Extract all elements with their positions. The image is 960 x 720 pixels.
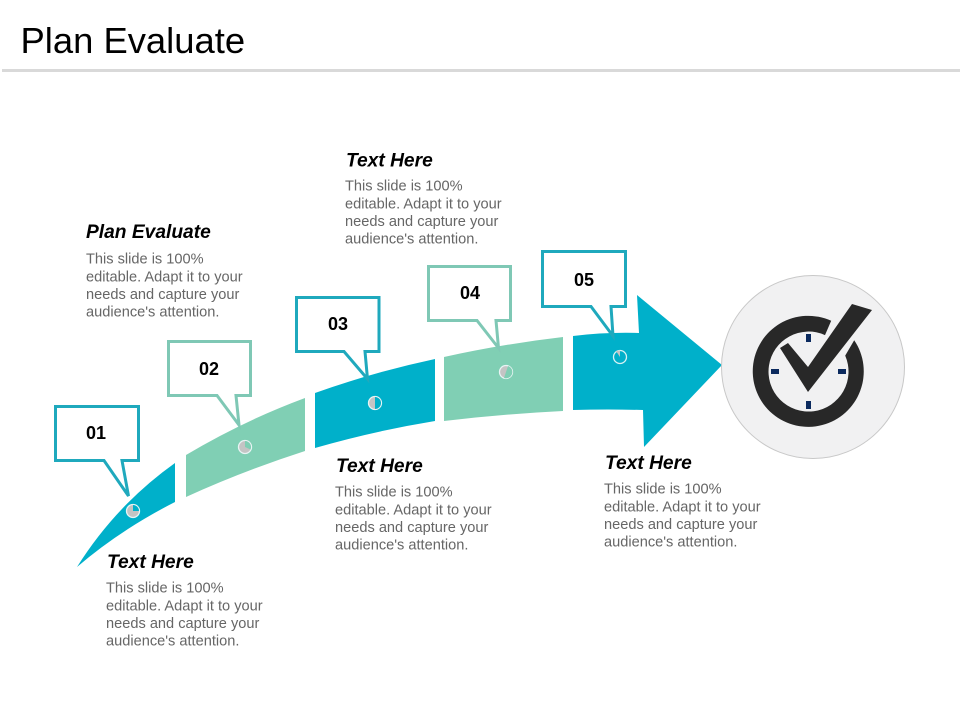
text block: bottom centre: editable. Adapt it to your [335, 502, 492, 518]
clock check icon [722, 276, 904, 458]
text block: Plan Evaluate: needs and capture your [86, 287, 239, 303]
pie icon 3 [368, 396, 382, 410]
text block: bottom centre: Text Here [336, 456, 423, 477]
text block: bottom centre [335, 456, 492, 554]
callout 02 [168, 342, 250, 425]
text block: Plan Evaluate: Plan Evaluate [86, 222, 211, 243]
text block: bottom right: This slide is 100% [604, 482, 722, 498]
text block: Plan Evaluate: audience's attention. [86, 304, 219, 320]
text block: bottom centre: needs and capture your [335, 520, 488, 536]
text block: bottom left: editable. Adapt it to your [106, 598, 263, 614]
callout 04: 04 [460, 283, 480, 303]
arrow segment 5 with head [573, 295, 722, 447]
callout 01 [56, 406, 138, 496]
callout 05: 05 [574, 270, 594, 290]
text block: bottom right: Text Here [605, 453, 692, 474]
arrow segment 2 [186, 398, 305, 497]
callout 04 [428, 266, 510, 348]
callout 02: 02 [199, 359, 219, 379]
text block: top [345, 150, 502, 248]
text block: top: audience's attention. [345, 232, 478, 248]
check mark [780, 304, 872, 392]
arrow segment 3 [315, 359, 435, 448]
arrow segment 1 [77, 463, 175, 567]
callout 03: 03 [328, 314, 348, 334]
text block: top: editable. Adapt it to your [345, 196, 502, 212]
pie icon 2 [238, 440, 252, 454]
text block: bottom left: needs and capture your [106, 616, 259, 632]
text block: bottom right [604, 453, 761, 550]
text block: bottom centre: audience's attention. [335, 538, 468, 554]
text block: bottom left [106, 552, 263, 650]
text block: Plan Evaluate: editable. Adapt it to your [86, 270, 243, 286]
arrow segment 4 [444, 337, 563, 421]
text block: Plan Evaluate [86, 222, 243, 320]
curved arrow [77, 295, 722, 567]
text block: bottom left: This slide is 100% [106, 580, 224, 596]
pie icon 1 [126, 504, 140, 518]
text block: top: This slide is 100% [345, 178, 463, 194]
text block: bottom centre: This slide is 100% [335, 484, 453, 500]
text block: bottom right: audience's attention. [604, 534, 737, 550]
pie icon 5 [614, 350, 626, 364]
grey circle [722, 276, 904, 458]
clock ticks [771, 334, 846, 409]
title: Plan Evaluate [20, 20, 245, 61]
text block: bottom right: editable. Adapt it to your [604, 500, 761, 516]
text block: bottom left: audience's attention. [106, 634, 239, 650]
pie icon 4 [500, 366, 512, 378]
text block: bottom right: needs and capture your [604, 517, 757, 533]
callout 05 [542, 252, 626, 336]
text block: bottom left: Text Here [107, 552, 194, 573]
callout 01: 01 [86, 423, 106, 443]
clock ring [753, 316, 864, 427]
text block: top: needs and capture your [345, 214, 498, 230]
text block: top: Text Here [346, 150, 433, 172]
text block: Plan Evaluate: This slide is 100% [86, 252, 204, 268]
callout 03 [296, 298, 379, 379]
